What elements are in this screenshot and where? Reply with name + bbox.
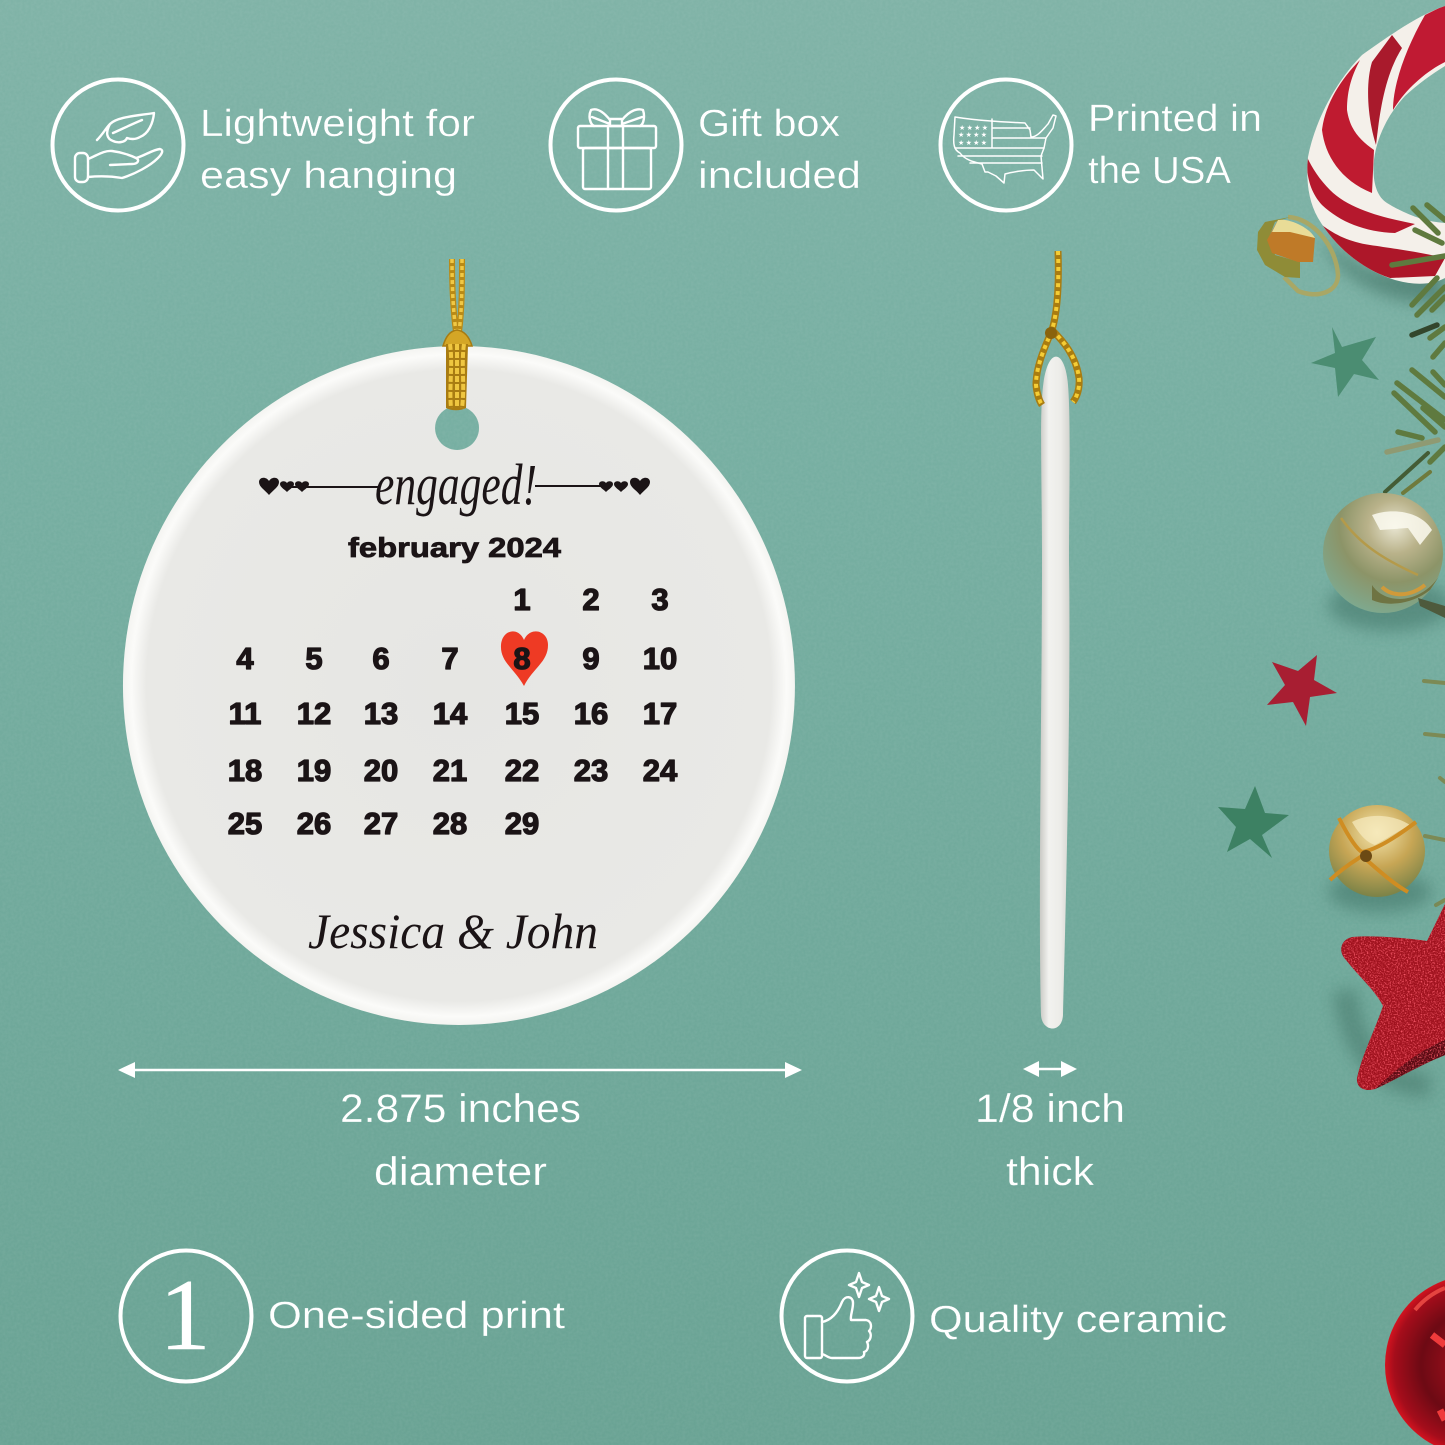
calendar dates: 11 bbox=[229, 696, 261, 731]
ornament side view bbox=[1036, 251, 1079, 1029]
text: thickness bbox=[975, 1087, 1125, 1194]
text: one-sided print: One-sided print bbox=[268, 1295, 565, 1337]
calendar dates: 4 bbox=[236, 641, 254, 676]
feature: one-sided print bbox=[120, 1250, 565, 1382]
text: diameter: 2.875 inches bbox=[340, 1087, 581, 1131]
cord: gold loop front bbox=[443, 259, 472, 410]
calendar dates: 29 bbox=[505, 806, 539, 841]
icon: leaf over open hand bbox=[75, 113, 162, 182]
icon: USA flag map bbox=[954, 115, 1056, 183]
decoration: green confetti star bbox=[1218, 786, 1289, 858]
decoration: pine branches bbox=[1385, 205, 1445, 905]
text: gift box included: Gift box bbox=[698, 103, 840, 145]
text: thickness: thick bbox=[1006, 1150, 1095, 1194]
text: lightweight for easy hanging bbox=[200, 103, 475, 197]
text: printed in the USA: Printed in bbox=[1088, 98, 1262, 140]
calendar dates: 27 bbox=[364, 806, 398, 841]
text: thickness: 1/8 inch bbox=[975, 1087, 1125, 1131]
engaged banner: engaged! bbox=[375, 452, 537, 517]
decoration: red glitter star bbox=[1341, 904, 1445, 1090]
ornament front view bbox=[123, 259, 795, 1025]
calendar dates: 20 bbox=[364, 753, 398, 788]
text: lightweight for easy hanging: easy hanging bbox=[200, 155, 457, 197]
decoration: red bauble bottom bbox=[1385, 1275, 1445, 1445]
feature: gift box bbox=[550, 80, 682, 210]
calendar dates: 24 bbox=[643, 753, 678, 788]
calendar dates: 13 bbox=[364, 696, 398, 731]
icon: USA flag map: ★★★★ bbox=[959, 124, 988, 132]
text: gift box included bbox=[698, 103, 861, 197]
text: quality ceramic: Quality ceramic bbox=[929, 1299, 1227, 1341]
calendar dates: 14 bbox=[433, 696, 468, 731]
calendar dates: 6 bbox=[372, 641, 390, 676]
calendar dates: 21 bbox=[433, 753, 467, 788]
arrow: width bbox=[118, 1062, 802, 1078]
engaged banner bbox=[259, 452, 650, 517]
calendar dates: 9 bbox=[582, 641, 600, 676]
text: lightweight for easy hanging: Lightweight for bbox=[200, 103, 475, 145]
calendar dates: 5 bbox=[305, 641, 323, 676]
text: gift box included: included bbox=[698, 155, 861, 197]
calendar dates: 1 bbox=[513, 582, 531, 617]
dimension: diameter bbox=[118, 1062, 802, 1194]
decoration: silver bauble bbox=[1323, 493, 1445, 631]
calendar dates: 26 bbox=[297, 806, 331, 841]
names: Jessica & John bbox=[308, 903, 598, 959]
calendar dates: 7 bbox=[441, 641, 459, 676]
calendar dates: 25 bbox=[228, 806, 262, 841]
calendar dates: 8 bbox=[513, 641, 531, 676]
month heading: february 2024 bbox=[348, 532, 562, 563]
icon: USA flag map: ★★★★ bbox=[958, 131, 987, 139]
cord: side loop bbox=[1036, 251, 1079, 405]
calendar dates: 22 bbox=[505, 753, 539, 788]
calendar dates: 18 bbox=[228, 753, 262, 788]
calendar dates: 28 bbox=[433, 806, 467, 841]
decoration: gold bell bbox=[1328, 805, 1432, 912]
calendar dates: 23 bbox=[574, 753, 608, 788]
text: printed in the USA: the USA bbox=[1088, 150, 1232, 192]
calendar dates: 12 bbox=[297, 696, 331, 731]
decoration: green star top bbox=[1311, 327, 1379, 397]
text: printed in the USA bbox=[1088, 98, 1262, 192]
calendar dates: 3 bbox=[651, 582, 669, 617]
dimension: thickness bbox=[975, 1061, 1125, 1194]
heart marker bbox=[501, 631, 548, 686]
icon: USA flag map: ★★★★ bbox=[958, 139, 987, 147]
icon: numeral one: 1 bbox=[160, 1259, 210, 1372]
decoration: candy cane bbox=[1300, 0, 1445, 305]
icon: thumbs up with sparkles bbox=[805, 1273, 889, 1358]
calendar dates bbox=[228, 582, 678, 841]
calendar dates: 2 bbox=[582, 582, 600, 617]
calendar dates: 16 bbox=[574, 696, 608, 731]
feature: lightweight bbox=[52, 80, 184, 210]
icon: gift box bbox=[578, 109, 656, 189]
text: diameter bbox=[340, 1087, 581, 1194]
feature: printed in USA bbox=[940, 80, 1072, 210]
decoration: gold ribbon curl bbox=[1257, 217, 1338, 294]
text: diameter: diameter bbox=[374, 1150, 547, 1194]
calendar dates: 17 bbox=[643, 696, 677, 731]
calendar dates: 19 bbox=[297, 753, 331, 788]
calendar dates: 15 bbox=[505, 696, 539, 731]
arrow: thickness bbox=[1023, 1061, 1077, 1077]
feature: quality ceramic bbox=[782, 1250, 1227, 1382]
decoration: red confetti star bbox=[1267, 655, 1337, 726]
calendar dates: 10 bbox=[643, 641, 677, 676]
